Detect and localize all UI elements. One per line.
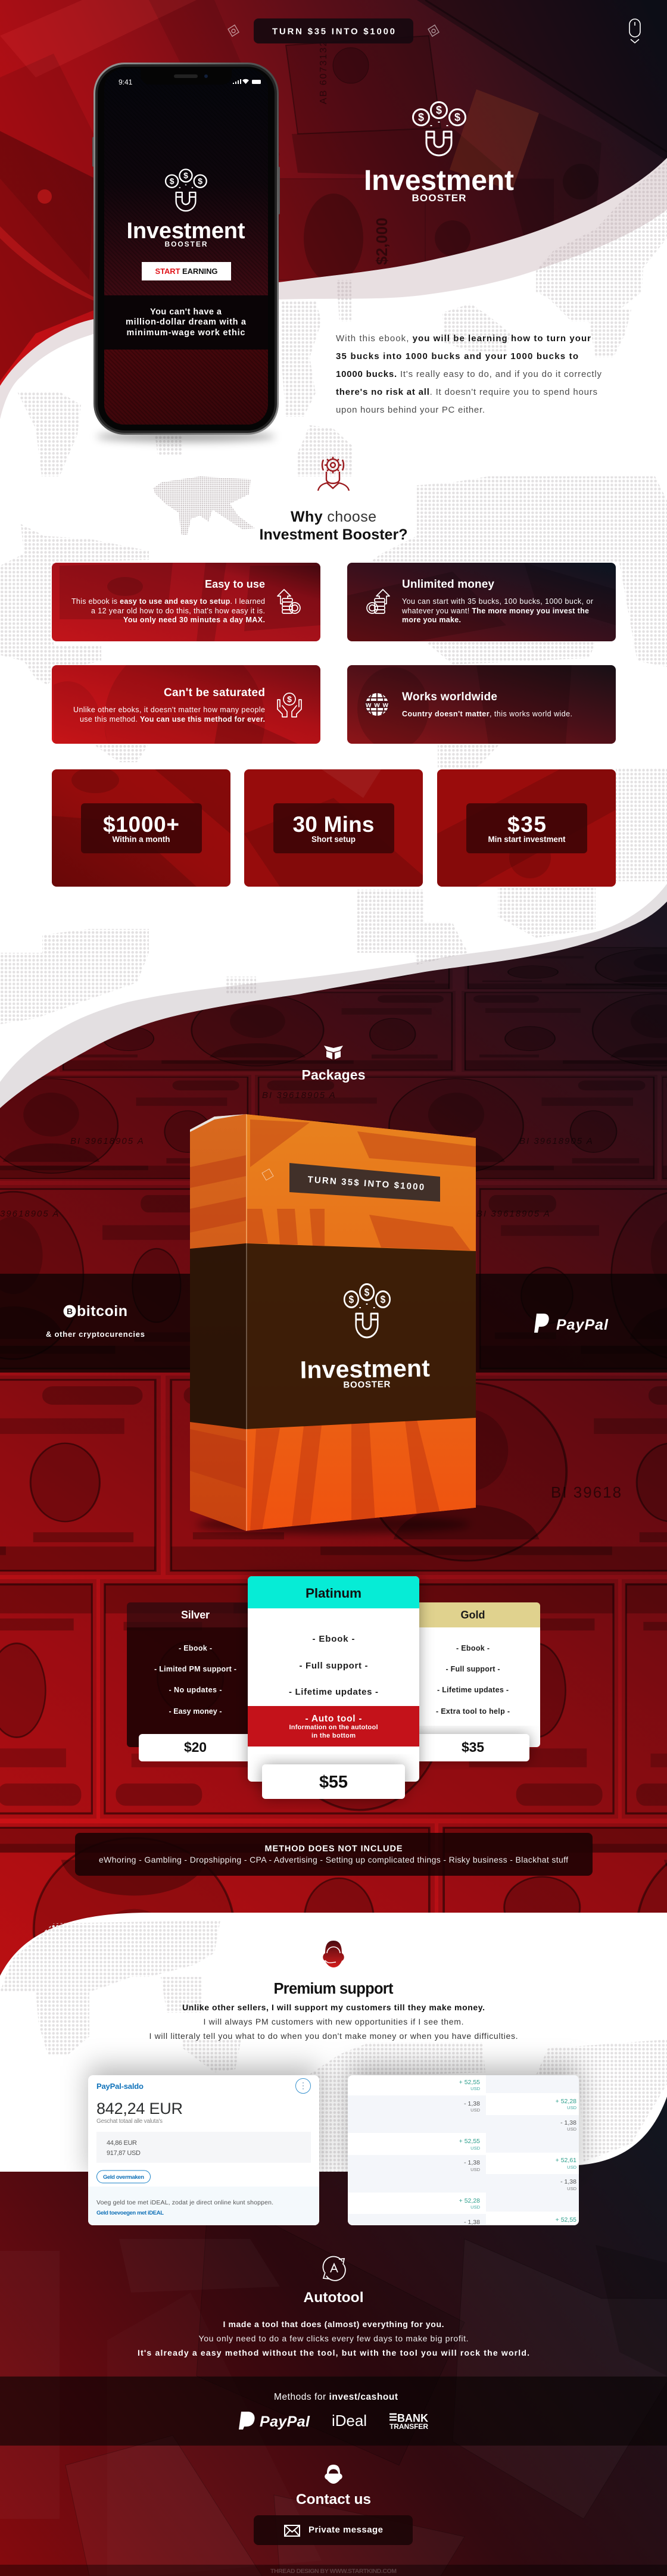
exclusions bar: METHOD DOES NOT INCLUDE [264, 1844, 403, 1854]
bitcoin logo: bitcoin [77, 1303, 127, 1320]
box wordmark: Investment [300, 1354, 430, 1384]
paypal method: PayPal [260, 2413, 310, 2430]
paypal balance screenshot: Geld overmaken [103, 2174, 144, 2181]
dotted world map background [0, 161, 667, 1024]
support text [149, 2003, 518, 2041]
phone quote: minimum-wage work ethic [126, 328, 245, 338]
icon: gear head [318, 457, 349, 491]
stat card: $35: Min start investment [488, 835, 566, 844]
footer: THREAD DESIGN BY WWW.STARTKIND.COM [270, 2568, 397, 2575]
phone logo: $ [170, 176, 174, 186]
paypal balance screenshot: Geld toevoegen met iDEAL [96, 2210, 164, 2216]
paypal logo: PayPal [556, 1317, 609, 1333]
hero money background: AB 60731325 [319, 33, 329, 104]
phone wordmark: Investment [126, 219, 245, 244]
stat card: $1000+ [52, 767, 230, 887]
transactions screenshot [348, 2075, 579, 2226]
white support section [0, 1913, 667, 2172]
pricing: gold: - Ebook - [456, 1644, 490, 1652]
payment band [0, 1274, 667, 1373]
pricing: platinum: - Ebook - [312, 1634, 355, 1644]
start earning button: START EARNING [155, 267, 218, 276]
pricing: platinum: Platinum [306, 1586, 361, 1601]
pricing: gold: - Extra tool to help - [436, 1707, 510, 1716]
transactions screenshot: USD [470, 2145, 481, 2151]
header pill [254, 18, 413, 43]
transactions screenshot: + 52,61 [556, 2157, 576, 2164]
pricing: gold: Gold [461, 1609, 485, 1621]
pricing: gold: - Full support - [445, 1665, 500, 1673]
auto tool band: Information on the autotool [289, 1724, 378, 1731]
panel: works worldwide [347, 665, 616, 750]
pricing: silver: Silver [181, 1609, 210, 1621]
pricing: silver: - Limited PM support - [154, 1665, 236, 1673]
start earning button [142, 262, 231, 280]
icon: hands holding coin: $ [287, 694, 292, 704]
money section background: 39618905 A [0, 1209, 60, 1219]
paypal balance screenshot: Voeg geld toe met iDEAL, zodat je direct online kunt shoppen. [96, 2199, 273, 2206]
panel: unlimited money: Unlimited money [402, 578, 494, 591]
box title pill: TURN 35$ INTO $1000 [307, 1175, 425, 1192]
transactions screenshot: USD [470, 2107, 481, 2113]
platinum price [262, 1764, 405, 1799]
pricing: gold: - Lifetime updates - [437, 1686, 509, 1694]
heading: why choose [260, 509, 407, 543]
transactions screenshot: - 1,38 [560, 2119, 576, 2126]
pricing: silver: - No updates - [169, 1686, 222, 1694]
paypal balance screenshot: 842,24 EUR [96, 2100, 183, 2117]
intro paragraph [336, 333, 601, 415]
transactions screenshot: + 52,28 [556, 2098, 576, 2105]
stat card: $35 [437, 769, 616, 887]
paypal balance screenshot: 44,86 EUR [107, 2140, 137, 2147]
transactions screenshot: USD [567, 2186, 577, 2191]
bitcoin logo [46, 1303, 145, 1339]
paypal balance screenshot: 917,87 USD [107, 2150, 141, 2157]
heading: why choose: Why choose [291, 509, 376, 525]
icon: support headset [323, 1941, 344, 1967]
transactions screenshot: + 52,55 [556, 2216, 576, 2223]
icon: money right of pill [428, 25, 439, 36]
panel: works worldwide: Works worldwide [402, 691, 497, 703]
panel: cannot be saturated: use this method. You can use this method for ever. [80, 715, 265, 723]
box side icon [262, 1169, 273, 1180]
transactions screenshot: + 52,28 [459, 2197, 480, 2204]
icon: scroll mouse [629, 19, 640, 43]
stat card: 30 mins [244, 769, 423, 887]
panel: unlimited money: You can start with 35 bucks, 100 bucks, 1000 buck, or [402, 597, 593, 606]
pricing: platinum [248, 1576, 419, 1799]
intro paragraph: With this ebook, you will be learning how to turn your [336, 333, 591, 344]
platinum price: $55 [319, 1773, 348, 1792]
support text: I will litteraly tell you what to do when you don't make money or when you have difficulties. [149, 2031, 518, 2041]
bitcoin logo: & other cryptocurencies [46, 1330, 145, 1339]
methods band [0, 2377, 667, 2446]
silver price: $20 [184, 1739, 207, 1755]
phone screen [104, 171, 268, 425]
box logo: $ [381, 1293, 386, 1305]
money section background: BI 39618905 A [70, 1136, 145, 1146]
phone notch [141, 67, 232, 85]
paypal balance screenshot [88, 2075, 319, 2225]
status bar: 9:41 [119, 78, 133, 86]
panel: easy to use: You only need 30 minutes a day MAX. [123, 616, 265, 624]
phone quote [126, 307, 247, 338]
bank transfer method: TRANSFER [389, 2422, 428, 2431]
transactions screenshot: USD [567, 2165, 577, 2170]
stat card: 30 mins: Short setup [311, 835, 356, 844]
transactions screenshot: + 52,55 [459, 2079, 480, 2086]
icon: www globe [364, 693, 389, 716]
panel: unlimited money [347, 563, 616, 641]
transactions screenshot: - 1,38 [464, 2100, 480, 2107]
panel: unlimited money: whatever you want! The more money you invest the [401, 607, 589, 615]
money section background: BI 39618905 A [519, 1136, 594, 1146]
hero logo: Investment [364, 165, 514, 197]
panel: easy to use: This ebook is easy to use and easy to setup. I learned [71, 597, 265, 606]
transactions screenshot: USD [470, 2204, 481, 2210]
icon: packages box [324, 1046, 343, 1059]
intro paragraph: 35 bucks into 1000 bucks and your 1000 bucks to [336, 351, 578, 361]
transactions screenshot: + 52,55 [459, 2138, 480, 2145]
auto tool band: - Auto tool - [305, 1714, 362, 1724]
icon: logo balloons and magnet: $ [436, 104, 442, 116]
intro paragraph: there's no risk at all. It doesn't require you to spend hours [336, 387, 597, 397]
pricing: silver: - Easy money - [169, 1707, 222, 1716]
panel: cannot be saturated: Can't be saturated [164, 687, 265, 699]
box wordmark: BOOSTER [343, 1379, 391, 1390]
transactions screenshot: USD [567, 2126, 577, 2132]
icon: logo balloons and magnet [413, 102, 466, 155]
icon: coins with arrow [367, 590, 389, 613]
bank transfer method: BANK [397, 2412, 428, 2424]
icon: hands holding coin [278, 693, 301, 717]
second wave light band [0, 884, 667, 1191]
phone logo: $ [198, 176, 202, 186]
hero logo [364, 102, 514, 204]
panel: unlimited money: more you make. [402, 616, 461, 624]
paypal logo [534, 1314, 609, 1333]
heading: contact us: Contact us [296, 2491, 371, 2508]
autotool text [138, 2319, 529, 2357]
transactions screenshot: USD [470, 2167, 481, 2172]
hero logo: BOOSTER [412, 192, 466, 204]
lower section bills [0, 2191, 667, 2576]
phone quote: million-dollar dream with a [126, 317, 247, 327]
box logo: $ [349, 1293, 354, 1305]
support text: I will always PM customers with new opportunities if I see them. [204, 2017, 463, 2026]
auto tool band [248, 1706, 419, 1747]
product box [190, 1114, 476, 1534]
hero money background: $2,000 [373, 217, 391, 265]
box title pill [289, 1163, 440, 1202]
ideal method: iDeal [332, 2412, 367, 2430]
pricing: gold [411, 1602, 540, 1761]
header pill: TURN $35 INTO $1000 [272, 26, 395, 37]
transactions screenshot: USD [567, 2105, 577, 2110]
stat card: 30 mins: 30 Mins [293, 812, 374, 837]
methods heading: Methods for invest/cashout [274, 2392, 398, 2402]
pricing: silver [127, 1602, 258, 1761]
small world map [153, 476, 255, 535]
hero wave light band [0, 0, 667, 419]
gold price [411, 1734, 529, 1761]
heading: autotool: Autotool [304, 2290, 363, 2306]
transactions screenshot: USD [470, 2086, 481, 2091]
icon: logo balloons and magnet: $ [418, 111, 424, 123]
icon: autotool [323, 2257, 345, 2281]
panel: works worldwide: Country doesn't matter, this works world wide. [402, 710, 572, 718]
box logo [344, 1284, 390, 1337]
autotool text: I made a tool that does (almost) everything for you. [223, 2319, 444, 2329]
autotool text: It's already a easy method without the tool, but with the tool you will rock the world. [138, 2348, 529, 2357]
icon: www globe: www [365, 700, 389, 709]
box logo: $ [364, 1286, 370, 1298]
panel: easy to use: a 12 year old how to do this, that's how easy it is. [91, 607, 265, 615]
status bar [119, 78, 261, 86]
autotool text: You only need to do a few clicks every few days to make big profit. [199, 2334, 468, 2343]
phone mockup [92, 63, 280, 442]
phone quote: You can't have a [150, 307, 222, 317]
intro paragraph: upon hours behind your PC either. [336, 405, 485, 415]
pricing: silver: - Ebook - [179, 1644, 212, 1652]
silver price [139, 1734, 258, 1761]
footer [0, 2565, 667, 2576]
bank transfer method [389, 2412, 428, 2431]
money section background: BI 39618 [551, 1483, 622, 1501]
gold price: $35 [462, 1739, 484, 1755]
icon: contact headset [325, 2465, 342, 2484]
exclusions bar: eWhoring - Gambling - Dropshipping - CPA - Advertising - Setting up complicated things - Risky business - Blackhat stuff [99, 1855, 568, 1864]
money section background [0, 884, 667, 2028]
paypal method [239, 2412, 310, 2430]
pricing: platinum: - Lifetime updates - [289, 1687, 378, 1697]
stat card: $35: $35 [507, 812, 546, 837]
support section dots [0, 1920, 667, 2172]
method logos [239, 2412, 428, 2431]
phone wordmark: BOOSTER [164, 240, 207, 248]
auto tool band: in the bottom [311, 1732, 356, 1739]
icon: money left of pill [228, 25, 239, 36]
heading: premium support: Premium support [274, 1981, 394, 1997]
transactions screenshot: - 1,38 [464, 2219, 480, 2226]
panel: easy to use [52, 563, 320, 641]
phone logo [166, 169, 207, 211]
paypal balance screenshot: PayPal-saldo [96, 2082, 144, 2091]
private message button [254, 2515, 413, 2545]
bitcoin logo: B [67, 1306, 73, 1316]
money section background: BI 39618905 A [262, 1090, 336, 1100]
panel: cannot be saturated [52, 665, 320, 744]
exclusions bar [75, 1833, 593, 1876]
paypal balance screenshot: Geschat totaal alle valuta's [96, 2118, 163, 2125]
private message button: Private message [308, 2525, 383, 2535]
heading: why choose: Investment Booster? [260, 526, 407, 543]
hero money background [0, 0, 667, 393]
lower section money background [0, 1983, 667, 2576]
transactions screenshot: - 1,38 [560, 2178, 576, 2185]
heading: packages: Packages [301, 1067, 366, 1083]
money section background: BI 39618905 A [476, 1209, 551, 1219]
card shadows [88, 2066, 579, 2173]
phone logo: $ [183, 171, 188, 180]
stat card: $1000+: Within a month [112, 835, 170, 844]
stat card: $1000+: $1000+ [103, 812, 179, 837]
support text: Unlike other sellers, I will support my customers till they make money. [182, 2003, 485, 2012]
transactions screenshot: - 1,38 [464, 2159, 480, 2166]
panel: cannot be saturated: Unlike other eboks, it doesn't matter how many people [73, 706, 265, 714]
box faces [190, 1114, 476, 1531]
panel: easy to use: Easy to use [205, 578, 265, 590]
pricing: platinum: - Full support - [299, 1661, 368, 1671]
icon: logo balloons and magnet: $ [454, 111, 460, 123]
intro paragraph: 10000 bucks. It's really easy to do, and if you do it correctly [336, 369, 601, 379]
icon: coins with arrow [278, 590, 300, 613]
